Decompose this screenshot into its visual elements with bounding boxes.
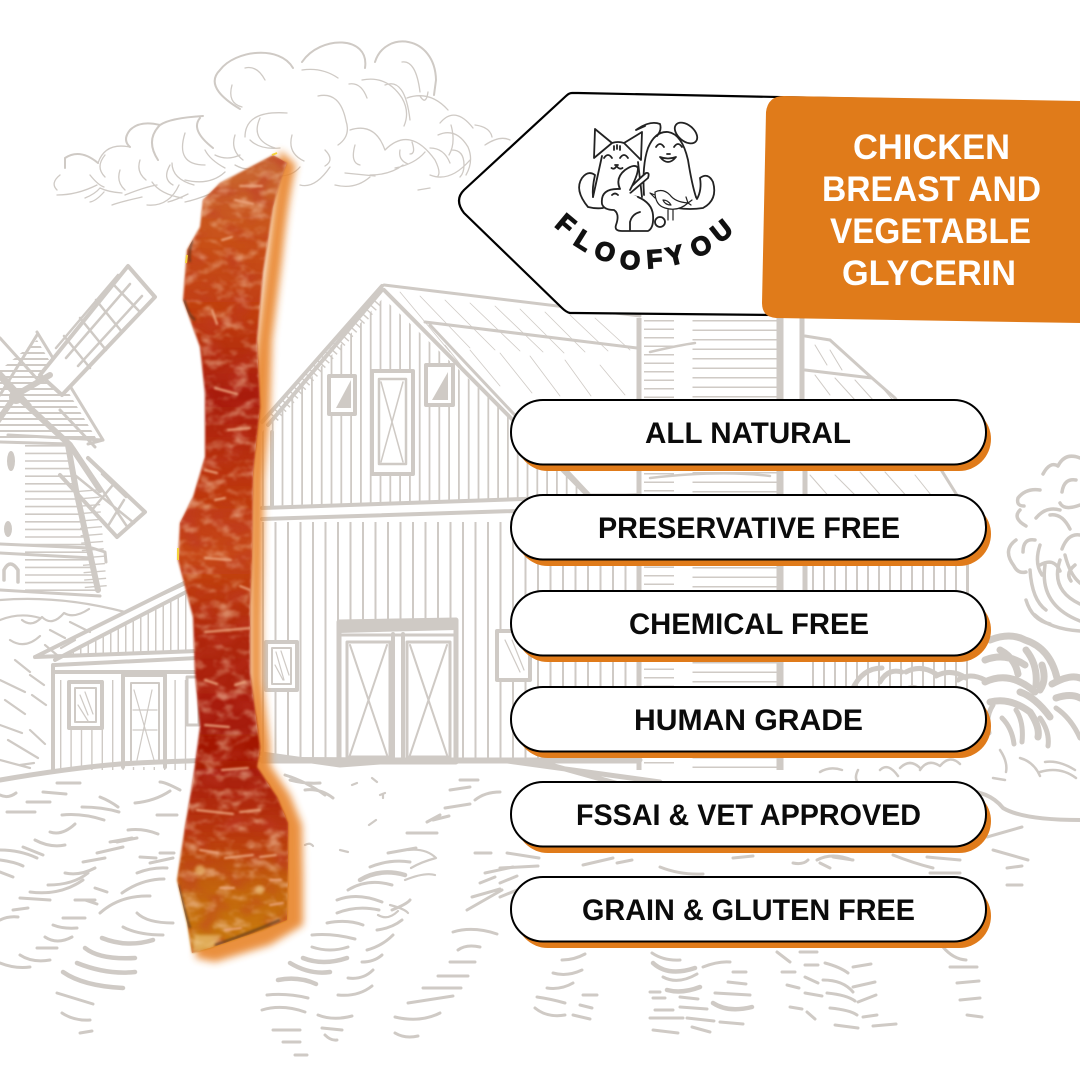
clouds	[54, 41, 510, 205]
pill: fssai and vet approved	[511, 782, 991, 853]
pill: chemical free: CHEMICAL FREE	[629, 608, 869, 641]
silo	[639, 318, 805, 770]
logo animals	[579, 119, 714, 231]
brand name: FLOOFYOU: O	[685, 228, 717, 264]
pill: grain and gluten free: GRAIN & GLUTEN FREE	[582, 894, 915, 927]
main barn: roof	[384, 285, 640, 495]
brand name: FLOOFYOU: O	[618, 244, 642, 276]
ingredients text: VEGETABLE	[830, 212, 1031, 251]
pill: all natural	[511, 400, 991, 471]
product: chicken jerky strip	[170, 150, 303, 962]
right barn	[805, 336, 970, 625]
strip yellow edge flecks	[178, 153, 277, 560]
main barn: upper gable	[262, 286, 640, 519]
icon: bird	[650, 191, 692, 220]
icon: cat	[579, 129, 642, 208]
brand name: FLOOFYOU: Y	[663, 239, 687, 272]
pill: chemical free	[511, 591, 991, 662]
strip texture	[177, 156, 288, 953]
tree and bushes	[820, 456, 1080, 784]
pill: preservative free	[511, 495, 991, 566]
strip glow	[195, 150, 303, 962]
ingredients text: BREAST AND	[822, 170, 1041, 209]
pill: preservative free: PRESERVATIVE FREE	[598, 512, 900, 545]
windmill: cap and tower	[0, 332, 106, 596]
pill: all natural: ALL NATURAL	[645, 417, 851, 450]
brand name: FLOOFYOU: O	[590, 234, 620, 269]
brand name: FLOOFYOU: F	[645, 244, 663, 275]
feature pills	[511, 400, 991, 948]
small barn	[35, 580, 199, 770]
pill: human grade: HUMAN GRADE	[634, 704, 863, 737]
hill below windmill	[0, 582, 190, 768]
ingredients text	[822, 128, 1041, 293]
logo tag	[459, 93, 1075, 318]
main barn: lower wall and doors	[262, 619, 640, 762]
tag outline	[459, 93, 1075, 318]
strip body	[177, 155, 288, 953]
ingredients text: GLYCERIN	[842, 254, 1016, 293]
brand name: FLOOFYOU	[550, 208, 738, 276]
windmill: blades	[0, 266, 155, 537]
pill: human grade	[511, 687, 991, 758]
icon: rabbit	[602, 166, 665, 231]
field furrows	[0, 775, 1028, 1055]
orange panel	[762, 96, 1080, 323]
brand name: FLOOFYOU: U	[705, 213, 738, 249]
brand name: FLOOFYOU: L	[569, 223, 599, 257]
icon: dog	[636, 119, 714, 209]
pill: grain and gluten free	[511, 877, 991, 948]
pill: fssai and vet approved: FSSAI & VET APPROVED	[576, 799, 921, 832]
ground line and barn base	[0, 754, 1080, 820]
ingredients text: CHICKEN	[853, 128, 1010, 167]
brand name: FLOOFYOU: F	[550, 208, 582, 241]
panel: ingredients label	[762, 96, 1080, 323]
